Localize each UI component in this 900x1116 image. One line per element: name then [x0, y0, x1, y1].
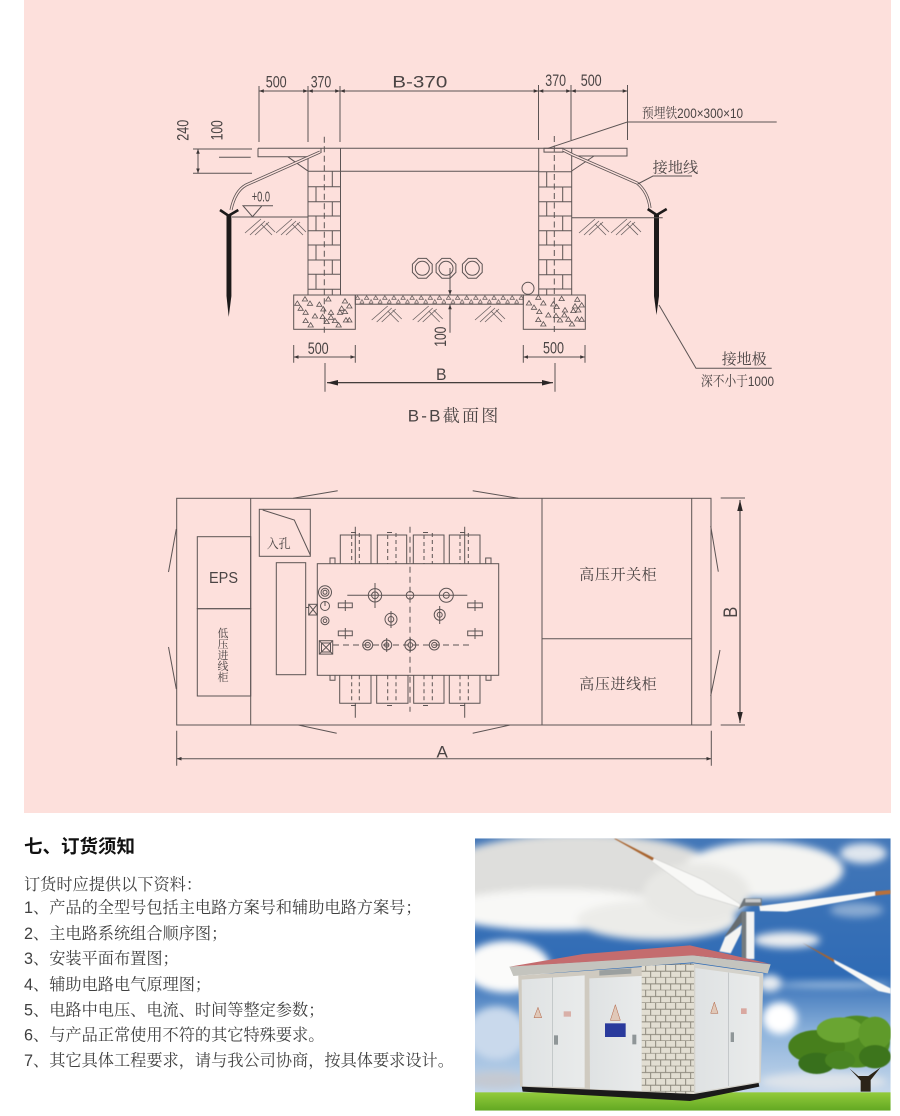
left footing: [294, 295, 355, 329]
clouds: [437, 833, 890, 1091]
text block: ordering requirements: 7、其它具体工程要求，请与我公司协商，按具体要求设计。: [24, 1052, 454, 1070]
grounding wire callout: 接地线: [653, 159, 698, 177]
right wall: [694, 963, 763, 1094]
left height dimensions: 240: [173, 120, 192, 141]
right footing: [523, 295, 585, 329]
text block: ordering requirements: 6、与产品正常使用不符的其它特殊要求。: [24, 1027, 324, 1045]
embedded iron callout: 预埋铁200×300×10: [642, 105, 743, 121]
center door: [589, 976, 642, 1091]
right double door: [695, 968, 759, 1092]
radiator fins bottom: [330, 675, 491, 718]
center lines: [333, 527, 470, 712]
left grounding wire and electrode: [220, 152, 320, 317]
tree: [788, 1016, 892, 1092]
grounding wire callout: [638, 159, 698, 184]
EPS cabinet: EPS: [209, 570, 238, 587]
concrete floor: [355, 295, 523, 304]
floor thickness dimension: [431, 268, 450, 347]
text block: ordering requirements: 3、安装平面布置图；: [24, 950, 179, 968]
fascia: [509, 955, 771, 976]
footing width dimensions: 500: [543, 338, 564, 357]
footing width dimensions: 500: [308, 339, 329, 358]
top dimension chain: B-370: [392, 72, 447, 91]
top dimension chain: 370: [311, 72, 331, 91]
low voltage incoming cabinet: 低: [218, 627, 228, 640]
text block: ordering requirements: 1、产品的全型号包括主电路方案号和辅助电路方案号；: [24, 899, 422, 917]
grass: [475, 1092, 891, 1111]
grounding electrode callout: 深不小于1000: [701, 373, 774, 389]
low voltage incoming cabinet: 压: [218, 638, 228, 651]
floor thickness dimension: 100: [431, 327, 450, 347]
plan drawing: equipment layout: [168, 491, 745, 766]
base: [522, 1082, 759, 1101]
footing width dimensions: [294, 338, 585, 363]
partition lines: [251, 498, 692, 725]
grounding electrode callout: 接地极: [722, 350, 767, 368]
dimension B: [721, 498, 745, 725]
top dimension chain: 500: [266, 72, 287, 91]
text block: ordering requirements: 4、辅助电路电气原理图；: [24, 976, 211, 994]
cable pipes: [412, 258, 534, 294]
photo: substation with wind turbine: [437, 833, 892, 1111]
dimension A: A: [436, 742, 448, 762]
terminal bars: [338, 600, 482, 639]
EPS cabinet: [197, 537, 251, 609]
low voltage incoming cabinet: 柜: [218, 670, 228, 684]
dimension A: [177, 731, 711, 766]
warning signs: [534, 1007, 542, 1018]
text block: ordering requirements: [24, 875, 454, 1070]
entry hole: [259, 509, 310, 556]
low voltage bar box: [276, 563, 306, 675]
high voltage switch cabinet label: 高压开关柜: [579, 565, 657, 583]
fin dashes: [352, 533, 468, 703]
high voltage incoming cabinet label: 高压进线柜: [579, 675, 657, 693]
ground level and hatching: +0.0: [252, 189, 270, 206]
blue nameplate: [605, 1023, 626, 1037]
top dimension chain: [259, 71, 628, 142]
left height dimensions: [173, 120, 252, 173]
dimension B: B: [721, 607, 742, 618]
control boxes: [309, 604, 333, 654]
low voltage incoming cabinet: 线: [218, 659, 228, 673]
overall B dimension: B: [436, 365, 446, 384]
outer enclosure: [177, 498, 711, 725]
bushings: [306, 583, 453, 652]
overall B dimension: [325, 363, 555, 392]
ground level and hatching: [232, 189, 663, 322]
vent: [599, 968, 631, 976]
radiator fins top: [330, 527, 491, 564]
low voltage incoming cabinet: 进: [218, 648, 228, 662]
text block: ordering requirements: 2、主电路系统组合顺序图；: [24, 925, 227, 943]
low voltage incoming cabinet: [197, 609, 251, 696]
door handles: [554, 1035, 558, 1045]
left brick wall: [308, 137, 340, 334]
right grounding wire and electrode: [563, 150, 667, 315]
heading: ordering notes: 七、订货须知: [24, 836, 135, 857]
text block: ordering requirements: 5、电路中电压、电流、时间等整定参数；: [24, 1001, 324, 1020]
section drawing: B-B cross section: [173, 71, 777, 426]
top dimension chain: 370: [545, 71, 566, 90]
grounding electrode callout: [659, 305, 774, 389]
transformer: [306, 527, 499, 718]
left double door: [522, 975, 585, 1088]
entry hole: 入孔: [267, 536, 291, 551]
section title: B-B截面图: [408, 407, 498, 426]
slab and brackets: [258, 148, 627, 171]
top dimension chain: 500: [581, 71, 602, 90]
door swing marks: [168, 491, 720, 733]
wind turbine: [614, 838, 891, 994]
left height dimensions: 100: [207, 120, 226, 140]
panel: pink drawing background: [24, 0, 891, 813]
brick wall: [642, 963, 694, 1094]
right brick wall: [539, 136, 572, 334]
left wall: [518, 963, 694, 1094]
embedded iron callout: [548, 105, 777, 148]
substation building: [509, 945, 771, 1101]
text block: ordering requirements: 订货时应提供以下资料：: [24, 875, 202, 894]
roof: [510, 945, 771, 967]
sky: [475, 838, 891, 1111]
